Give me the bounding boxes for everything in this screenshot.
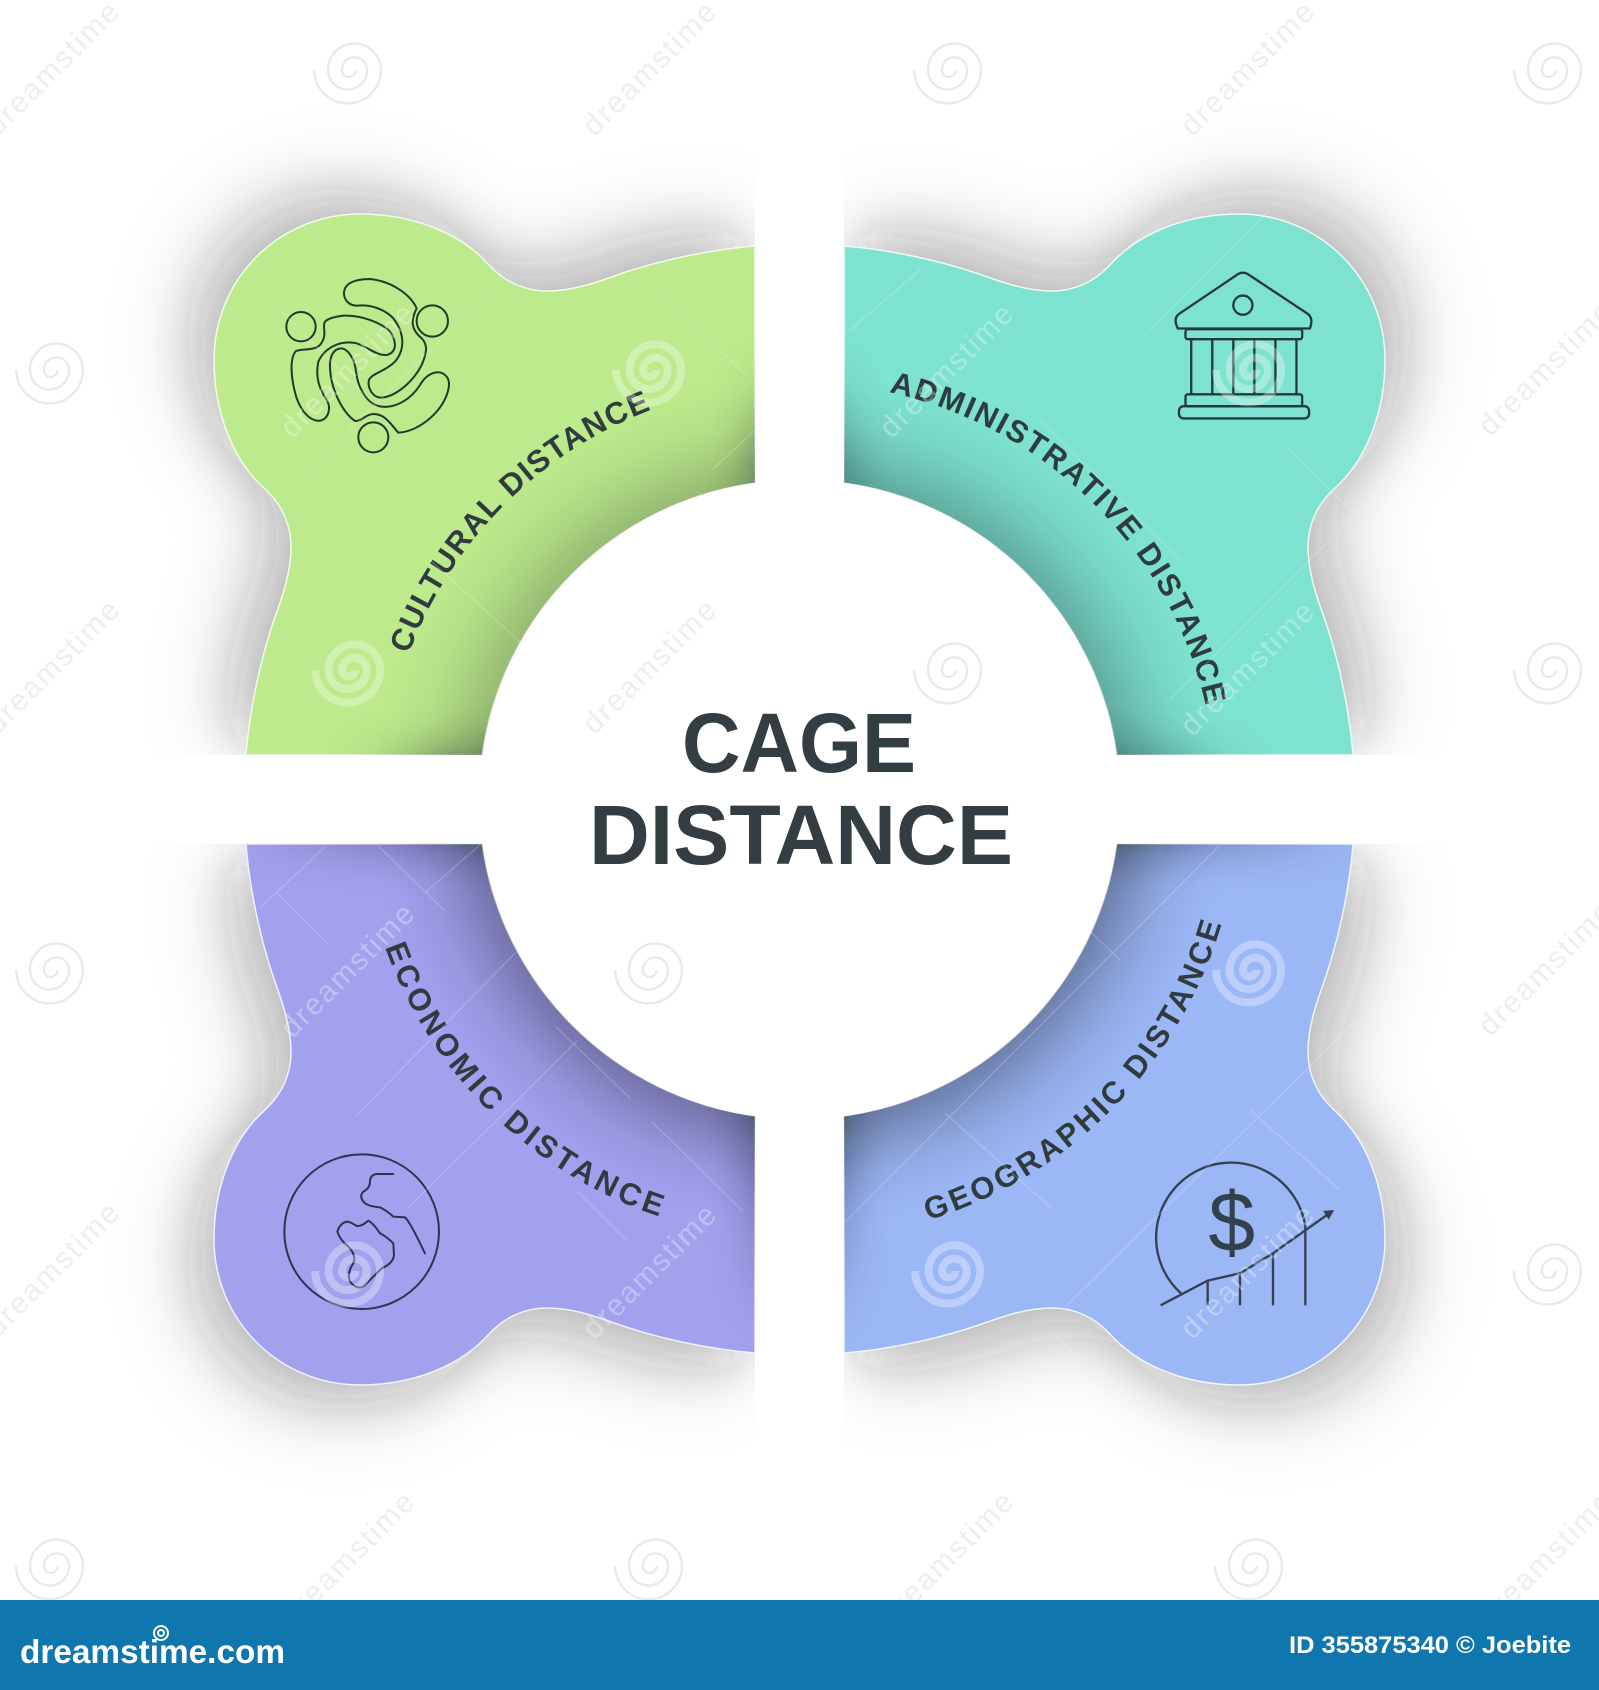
watermark: faint text on background: dreamstime xyxy=(576,592,724,740)
title: DISTANCE xyxy=(589,788,1013,882)
watermark: white text on tiles: dreamstime xyxy=(1174,1197,1322,1345)
watermark: faint text on background: dreamstime xyxy=(873,1484,1021,1632)
footer logo spiral xyxy=(154,1626,168,1640)
watermark: white text on tiles: dreamstime xyxy=(873,296,1021,444)
footer credit: ID 355875340 © Joebite xyxy=(1289,1632,1571,1659)
panel: administrative distance tile xyxy=(843,213,1386,756)
footer band xyxy=(0,1600,1599,1690)
label: cultural distance: CULTURAL DISTANCE xyxy=(392,390,650,650)
watermark: white text on tiles: dreamstime xyxy=(274,896,422,1044)
watermark: white text on tiles: dreamstime xyxy=(576,1197,724,1345)
watermark: white text on tiles: dreamstime xyxy=(1174,594,1322,742)
watermark: white text on tiles: dreamstime xyxy=(274,296,422,444)
icon: globe xyxy=(284,1154,439,1309)
icon: people swirl xyxy=(286,279,449,452)
panel: economic distance tile xyxy=(213,844,756,1386)
label: administrative distance: ADMINISTRATIVE DISTANCE xyxy=(890,373,1226,704)
title xyxy=(589,696,1013,882)
watermark: white crossing lines on tiles xyxy=(259,210,1380,1420)
label: geographic distance: GEOGRAPHIC DISTANCE xyxy=(925,919,1222,1218)
label: economic distance: ECONOMIC DISTANCE xyxy=(386,941,665,1216)
tile drop shadows: tight layer xyxy=(200,200,1399,1399)
title: CAGE xyxy=(682,696,916,790)
center circle xyxy=(480,480,1120,1120)
icon: dollar growth chart: $ xyxy=(1208,1175,1255,1269)
watermark: white spirals on tiles xyxy=(315,344,1281,1303)
tile drop shadows: soft wide layer xyxy=(188,188,1411,1411)
panel: cultural distance tile xyxy=(213,213,756,756)
watermark: faint text on background: dreamstime xyxy=(274,1484,422,1632)
icon: dollar growth chart xyxy=(1156,1163,1333,1305)
footer logo: dreamstime.com xyxy=(20,1633,285,1670)
panel: geographic distance tile xyxy=(844,844,1386,1386)
watermark: white text on tiles xyxy=(274,296,1322,1345)
icon: government building xyxy=(1176,273,1311,418)
watermark: white text on tiles: dreamstime xyxy=(872,896,1020,1044)
